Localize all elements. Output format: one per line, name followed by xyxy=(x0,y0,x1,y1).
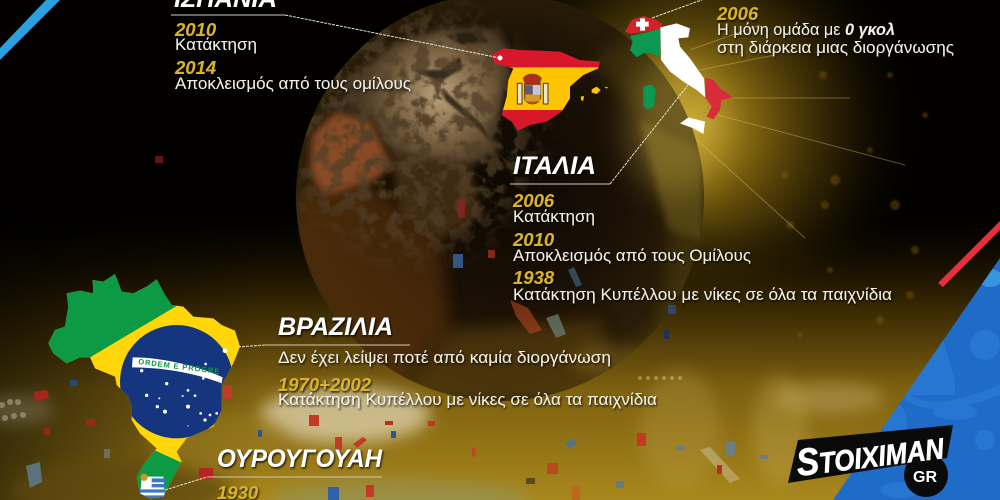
map: italy and switzerland xyxy=(625,16,733,134)
confetti xyxy=(26,156,768,500)
switzerland note: Η μόνη ομάδα με 0 γκολ xyxy=(717,20,895,39)
uruguay heading: ΟΥΡΟΥΓΟΥΑΗ xyxy=(217,445,383,473)
globe xyxy=(290,0,725,410)
northern land xyxy=(330,30,510,165)
map: spain xyxy=(490,47,608,133)
eastern limb xyxy=(640,120,702,240)
brazil heading: ΒΡΑΖΙΛΙΑ xyxy=(278,313,393,341)
switzerland note: 2006 xyxy=(716,3,759,24)
brazil text: Δεν έχει λείψει ποτέ από καμία διοργάνωση xyxy=(278,348,611,367)
spain text: 2014 xyxy=(174,57,216,78)
brazil text: Κατάκτηση Κυπέλλου με νίκες σε όλα τα παιχνίδια xyxy=(278,390,657,409)
blue corner panel xyxy=(833,258,1000,500)
lower amber land xyxy=(296,185,450,385)
italy heading: ΙΤΑΛΙΑ xyxy=(513,152,596,180)
stoiximan logo: GR xyxy=(913,469,937,486)
corner stripes xyxy=(0,0,1000,287)
stoiximan logo xyxy=(788,425,953,497)
spain text: Κατάκτηση xyxy=(175,35,257,54)
switzerland note: στη διάρκεια μιας διοργάνωσης xyxy=(717,38,954,57)
seas xyxy=(412,57,462,82)
brazil map: ORDEM E PROGRE xyxy=(138,357,220,376)
stoiximan logo: STOIXIMAN xyxy=(794,425,947,485)
italy text: 2010 xyxy=(512,229,555,250)
orange west bulge xyxy=(310,112,392,195)
light rays xyxy=(690,25,905,238)
connector lines xyxy=(165,0,707,490)
stadium lights xyxy=(0,376,682,421)
bokeh dots xyxy=(757,71,928,338)
stadium pitch xyxy=(10,370,808,500)
italy text: 2006 xyxy=(512,190,555,211)
italy text: 1938 xyxy=(513,267,555,288)
italy text xyxy=(510,184,892,304)
brazil text: 1970+2002 xyxy=(278,374,372,395)
italy text: Αποκλεισμός από τους Ομίλους xyxy=(513,246,751,265)
switzerland note xyxy=(716,3,954,57)
brazil text xyxy=(265,345,657,409)
italy text: Κατάκτηση Κυπέλλου με νίκες σε όλα τα παιχνίδια xyxy=(513,285,892,304)
spain text xyxy=(171,15,411,93)
spain text: Αποκλεισμός από τους ομίλους xyxy=(175,74,411,93)
spain text: 2010 xyxy=(174,19,217,40)
icon: spanish crest xyxy=(517,74,548,104)
italy text: Κατάκτηση xyxy=(513,207,595,226)
brazil map xyxy=(43,270,247,500)
